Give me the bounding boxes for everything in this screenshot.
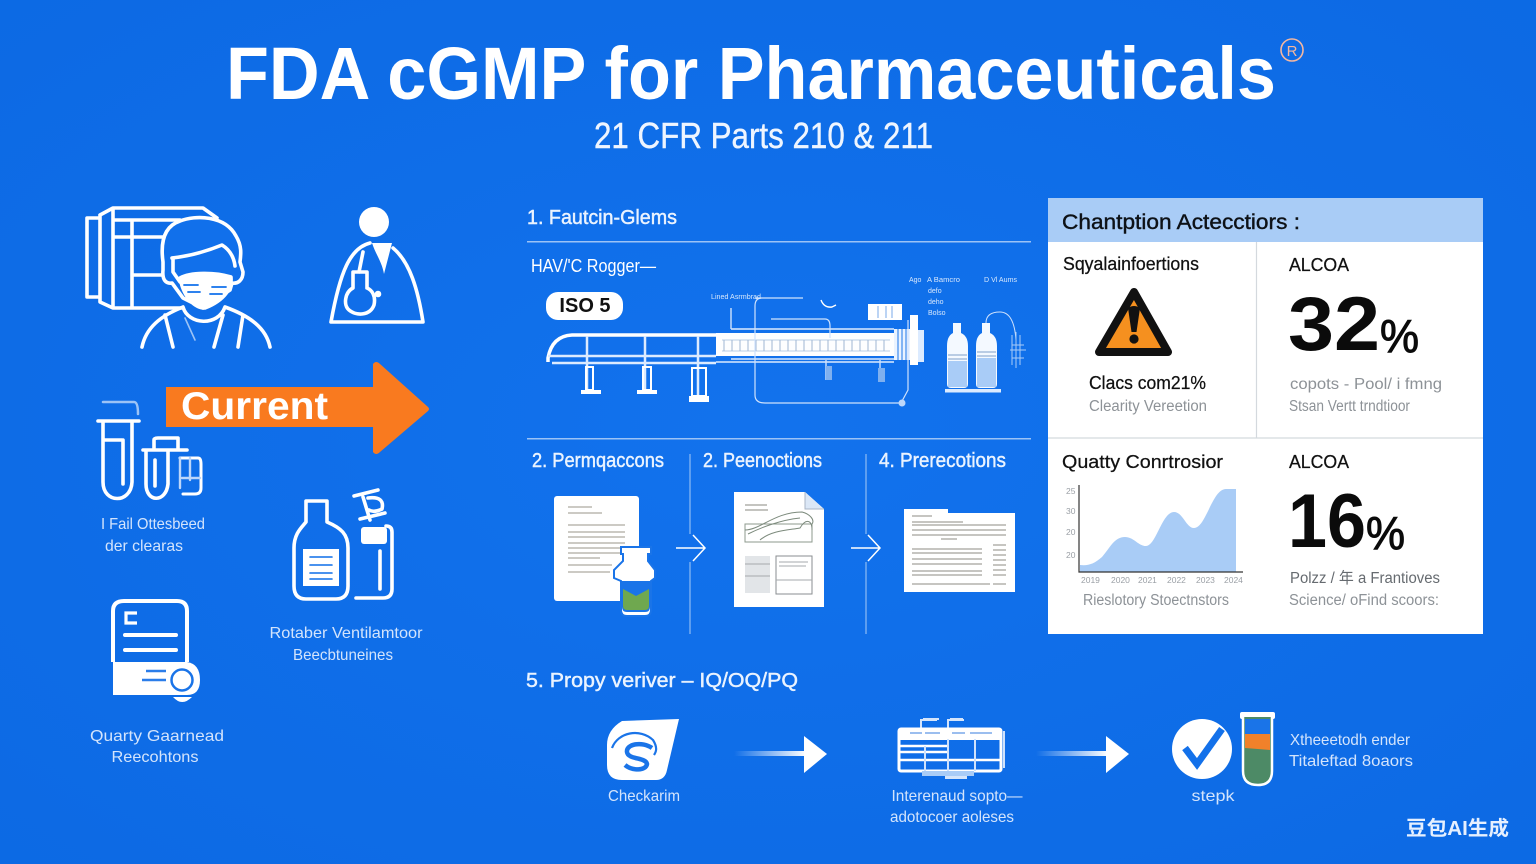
panel: compliance actions — [1048, 198, 1483, 634]
arrow: step 2 to 3 — [676, 535, 705, 561]
cell: ALCOA 16%: 16 — [1288, 479, 1366, 564]
diagram: filling line: deho — [928, 299, 944, 306]
icon: report with chart — [734, 492, 824, 607]
diagram: filling line: Ago — [909, 277, 922, 284]
diagram: filling line — [548, 277, 1026, 406]
cell: ALCOA 16%: Polzz / 年 a Frantioves — [1290, 569, 1440, 587]
arrow: Current: Current — [181, 385, 328, 428]
icon: gowned operator at cleanroom — [87, 208, 270, 347]
label: ventilation: Rotaber Ventilamtoor — [270, 625, 423, 642]
heading: section 3: 2. Peenoctions — [703, 450, 822, 472]
label: lab controls — [101, 516, 205, 555]
badge: ISO 5 — [546, 292, 623, 320]
icon: batch record with vial — [554, 496, 655, 616]
label: HVAC: HAV/'C Rogger— — [531, 256, 656, 276]
area chart: 2020 — [1111, 575, 1130, 585]
cell: ALCOA 32%: ALCOA — [1289, 255, 1349, 275]
heading: section 1: 1. Fautcin-Glems — [527, 207, 677, 229]
arrow: Current — [166, 362, 429, 454]
panel header: Chantption Actecctiors : — [1062, 211, 1300, 234]
label: lab controls: der clearas — [105, 538, 183, 555]
heading: section 4: 4. Prerecotions — [879, 450, 1006, 472]
area chart: 2021 — [1138, 575, 1157, 585]
icon: bottle and dropper — [294, 490, 392, 599]
title: R — [1287, 43, 1298, 60]
heading: section 5: 5. Propy veriver – IQ/OQ/PQ — [526, 670, 798, 692]
label: ventilation: Beecbtuneines — [293, 647, 393, 664]
label: quality guidance: Quarty Gaarnead — [90, 728, 224, 745]
cell: quality control chart: Rieslotory Stoectnstors — [1083, 592, 1229, 609]
label: threshold: Titaleftad 8oaors — [1289, 753, 1413, 770]
cell: warning statistic: Clacs com21% — [1089, 373, 1206, 393]
area chart: 2024 — [1224, 575, 1243, 585]
cell: ALCOA 32%: 32 — [1288, 282, 1380, 367]
label: threshold: Xtheeetodh ender — [1290, 732, 1411, 749]
area chart — [1066, 485, 1243, 585]
area chart: 25 — [1066, 486, 1076, 496]
diagram: filling line: Bolso — [928, 310, 946, 317]
label: checkform: Checkarim — [608, 788, 680, 805]
area chart: 20 — [1066, 527, 1076, 537]
label: quality guidance: Reecohtons — [112, 749, 198, 766]
panel header — [1048, 198, 1483, 242]
arrow: OQ to PQ — [1036, 736, 1129, 773]
label: ventilation — [270, 625, 423, 664]
label: internal audit: Interenaud sopto— — [892, 788, 1022, 805]
area chart: 30 — [1066, 506, 1076, 516]
area chart: 2019 — [1081, 575, 1100, 585]
icon: test tubes — [98, 402, 201, 498]
arrow: step 3 to 4 — [851, 535, 880, 561]
cell: warning statistic: Sqyalainfoertions — [1063, 254, 1199, 274]
title: FDA cGMP for Pharmaceuticals — [226, 32, 1276, 115]
cell: warning statistic — [1063, 254, 1207, 415]
cell: ALCOA 16% — [1288, 452, 1440, 609]
icon: specification sheet — [904, 509, 1015, 592]
cell: ALCOA 32% — [1288, 255, 1442, 415]
label: threshold — [1289, 732, 1413, 770]
diagram: filling line: defo — [928, 288, 942, 295]
icon: warning triangle — [1099, 292, 1168, 352]
diagram: filling line: A Bamcro — [927, 277, 960, 284]
label: step: stepk — [1192, 788, 1236, 805]
icon: verified check and tube — [1172, 712, 1275, 785]
area chart: 2022 — [1167, 575, 1186, 585]
label: quality guidance — [90, 728, 224, 766]
label: internal audit: adotocoer aoleses — [890, 809, 1014, 826]
cell: warning statistic: Clearity Vereetion — [1089, 398, 1207, 415]
cell: ALCOA 32%: % — [1380, 310, 1419, 362]
diagram: filling line: Lined Asrmbrad — [711, 294, 761, 301]
cell: ALCOA 32%: Stsan Vertt trndtioor — [1289, 398, 1410, 415]
badge: ISO 5: ISO 5 — [559, 295, 611, 317]
area chart: 2023 — [1196, 575, 1215, 585]
watermark: 豆包AI生成 — [1406, 816, 1509, 840]
icon: clinician with sample vial — [331, 207, 423, 322]
label: internal audit — [890, 788, 1022, 826]
diagram: filling line: D Vl Aums — [984, 277, 1017, 284]
cell: ALCOA 32%: copots - Pool/ i fmng — [1290, 376, 1442, 393]
cell: quality control chart — [1062, 452, 1243, 609]
cell: ALCOA 16%: ALCOA — [1289, 452, 1349, 472]
icon: qualification table — [899, 719, 1004, 779]
icon: quality document with seal — [113, 601, 200, 702]
cell: quality control chart: Quatty Conrtrosior — [1062, 452, 1223, 472]
subtitle: 21 CFR Parts 210 & 211 — [594, 115, 933, 156]
label: lab controls: I Fail Ottesbeed — [101, 516, 205, 533]
cell: ALCOA 16%: Science/ oFind scoors: — [1289, 592, 1439, 609]
arrow: IQ to OQ — [734, 736, 827, 773]
icon: checkform — [607, 719, 679, 780]
cell: ALCOA 16%: % — [1366, 507, 1405, 559]
heading: section 2: 2. Permqaccons — [532, 450, 664, 472]
area chart: 20 — [1066, 550, 1076, 560]
